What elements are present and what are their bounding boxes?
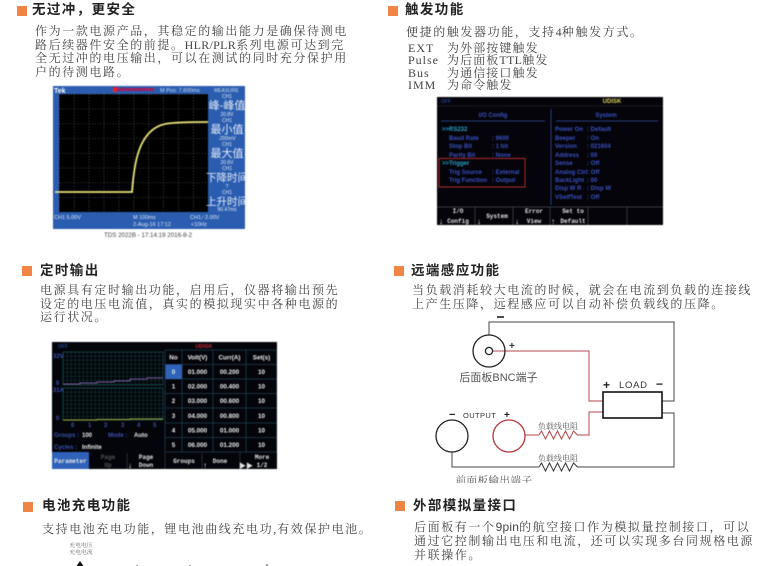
text block: trigger modes: 为命令触发: [447, 78, 513, 92]
screenshot: timer table screen: UDISK: [195, 344, 213, 350]
chart: oscilloscope screenshot: CH1: [222, 142, 232, 148]
screenshot: timer table screen: [51, 341, 278, 470]
heading: analog interface: 外部模拟量接口: [413, 498, 517, 513]
screenshot: IO config screen: Default: [560, 218, 586, 225]
screenshot: timer table screen: 10: [258, 413, 265, 420]
text block: analog interface: [414, 520, 754, 562]
chart: charging curve top edge: [69, 541, 268, 566]
section marker: [23, 502, 33, 512]
screenshot: timer table screen: Page: [139, 454, 154, 461]
screenshot: IO config screen: I/O Config: [479, 113, 508, 119]
panel: analog interface: [395, 498, 754, 562]
chart: oscilloscope screenshot: [52, 85, 247, 239]
screenshot: IO config screen: Trig Source: [449, 170, 483, 176]
screenshot: IO config screen: : On: [587, 136, 599, 142]
text block: no overshoot: 全无过冲的电压输出，可以在测试的同时充分保护用: [35, 51, 348, 65]
screenshot: timer table screen: 10: [258, 369, 265, 376]
screenshot: IO config screen: : Output: [492, 178, 515, 184]
chart: oscilloscope screenshot: CH1: [222, 166, 232, 172]
screenshot: IO config screen: View: [527, 218, 542, 225]
chart: oscilloscope screenshot: 峰-峰值: [209, 99, 245, 112]
screenshot: timer table screen: 5: [172, 442, 176, 449]
text block: timer output: [40, 283, 339, 324]
screenshot: timer table screen: 1: [172, 384, 176, 390]
screenshot: timer table screen: Cycles :: [54, 445, 77, 451]
screenshot: timer table screen: 31A: [53, 388, 65, 394]
screenshot: timer table screen: 0: [172, 369, 176, 376]
text block: timer output: 电源具有定时输出功能，启用后，仪器将输出预先: [40, 283, 339, 297]
screenshot: timer table screen: Set(s): [253, 354, 270, 362]
screenshot: IO config screen: : Off: [587, 161, 600, 167]
text block: no overshoot: 户的待测电路。: [35, 64, 130, 78]
text block: trigger modes: Bus: [408, 66, 430, 80]
text block: trigger intro: 便捷的触发器功能，支持4种触发方式。: [406, 25, 644, 39]
screenshot: timer table screen: 04.000: [188, 413, 208, 420]
screenshot: IO config screen: >>RS232: [442, 127, 468, 133]
screenshot: IO config screen: : None: [492, 153, 511, 159]
text block: battery charging: 支持电池充电功能，锂电池曲线充电功,有效保护电池。: [42, 522, 372, 536]
panel: trigger function: [388, 2, 664, 226]
screenshot: timer table screen: 2: [104, 423, 108, 429]
text block: no overshoot: 作为一款电源产品，其稳定的输出能力是确保待测电: [35, 24, 348, 38]
heading: battery charging: 电池充电功能: [42, 498, 131, 513]
chart: charging curve top edge: 充电电流: [69, 548, 93, 556]
diagram: remote sense wiring: +: [603, 378, 610, 392]
diagram: remote sense wiring: −: [656, 377, 663, 391]
diagram: remote sense wiring: 后面板BNC端子: [459, 370, 538, 384]
screenshot: IO config screen: Config: [447, 218, 469, 225]
heading: timer output: 定时输出: [40, 263, 100, 278]
screenshot: timer table screen: Up: [104, 462, 112, 469]
chart: oscilloscope screenshot: 下降时间: [206, 171, 247, 184]
screenshot: timer table screen: 0: [56, 416, 60, 422]
chart: oscilloscope screenshot: 最大值: [210, 146, 244, 160]
screenshot: IO config screen: Parity Bit: [449, 153, 475, 159]
screenshot: timer table screen: 00.800: [220, 413, 240, 420]
screenshot: timer table screen: 00.200: [220, 369, 240, 376]
diagram: remote sense wiring: OUTPUT: [463, 411, 496, 420]
diagram: remote sense wiring: 负载线电阻: [538, 453, 578, 463]
chart: oscilloscope screenshot: 上升时间: [206, 195, 247, 208]
section marker: [394, 266, 404, 276]
heading: remote sense: 远端感应功能: [411, 263, 500, 278]
screenshot: IO config screen: : Default: [587, 127, 611, 133]
screenshot: timer table screen: Curr(A): [218, 354, 241, 362]
screenshot: IO config screen: BackLight: [555, 178, 584, 184]
screenshot: timer table screen: 1/2: [257, 462, 268, 469]
text block: analog interface: 后面板有一个9pin的航空接口作为模拟量控制接口，可以: [414, 520, 750, 534]
screenshot: IO config screen: Set to: [562, 208, 584, 215]
screenshot: IO config screen: : Off: [587, 170, 600, 176]
screenshot: IO config screen: Power On: [555, 127, 583, 133]
screenshot: timer table screen: No: [169, 354, 178, 362]
screenshot: timer table screen: Volt(V): [188, 354, 207, 362]
heading: trigger: 触发功能: [405, 2, 465, 17]
screenshot: timer table screen: Groups :: [54, 433, 79, 439]
section marker: [22, 266, 32, 276]
screenshot: timer table screen: Page: [101, 454, 116, 461]
chart: oscilloscope screenshot: CH1 5.00V: [54, 215, 81, 221]
text block: remote sense: 上产生压降，远程感应可以自动补偿负载线的压降。: [412, 297, 725, 311]
screenshot: IO config screen: Stop Bit: [449, 144, 472, 150]
screenshot: timer table screen: 01.200: [220, 442, 240, 449]
chart: oscilloscope screenshot: Tek: [54, 88, 66, 95]
text block: analog interface: 并联操作。: [414, 548, 482, 562]
diagram: remote sense wiring: −: [449, 409, 455, 421]
screenshot: IO config screen: System: [595, 113, 617, 119]
text block: no overshoot: [35, 24, 348, 78]
screenshot: IO config screen: : External: [492, 170, 520, 176]
screenshot: timer table screen: 4: [172, 428, 176, 434]
screenshot: timer table screen: 1: [88, 423, 92, 429]
screenshot: timer table screen: Groups: [173, 458, 195, 465]
chart: oscilloscope screenshot: -200mV: [218, 136, 236, 142]
screenshot: timer table screen: 10: [258, 384, 265, 390]
chart: oscilloscope screenshot: 20.8V: [220, 112, 234, 118]
screenshot: timer table screen: 10: [258, 428, 265, 434]
chart: oscilloscope screenshot: CH1: [222, 94, 232, 100]
chart: oscilloscope screenshot: <10Hz: [191, 222, 207, 228]
screenshot: IO config screen: Error: [525, 208, 543, 215]
diagram: remote sense wiring: [435, 316, 674, 483]
screenshot: IO config screen: : 00: [587, 153, 598, 159]
screenshot: IO config screen: : 021604: [587, 144, 611, 150]
screenshot: timer table screen: Down: [139, 462, 154, 469]
screenshot: timer table screen: 05.000: [188, 428, 208, 434]
screenshot: IO config screen: VSelfTest: [555, 195, 582, 201]
diagram: remote sense wiring: +: [504, 410, 510, 421]
screenshot: timer table screen: 03.000: [188, 398, 208, 405]
chart: oscilloscope screenshot: 最小值: [210, 123, 244, 136]
screenshot: timer table screen: 3: [172, 413, 176, 420]
text block: trigger modes: Pulse: [408, 53, 439, 67]
screenshot: IO config screen: Baud Rate: [449, 136, 479, 142]
screenshot: IO config screen: UDISK: [603, 99, 622, 105]
chart: oscilloscope screenshot: CH1 ∕ 2.00V: [190, 215, 220, 221]
screenshot: timer table screen: 0: [56, 381, 60, 387]
text block: remote sense: [412, 283, 752, 311]
screenshot: IO config screen: Version: [555, 144, 577, 150]
screenshot: timer table screen: Done: [213, 458, 228, 465]
screenshot: IO config screen: Address: [555, 153, 580, 159]
chart: charging curve top edge: 充电电压: [69, 541, 93, 549]
diagram: remote sense wiring: +: [509, 341, 515, 352]
screenshot: timer table screen: 00.400: [220, 384, 240, 390]
text block: remote sense: 当负载消耗较大电流的时候，就会在电流到负载的连接线: [412, 283, 752, 297]
chart: oscilloscope screenshot: MEASURE: [214, 88, 239, 94]
panel: battery charging: [23, 498, 372, 566]
screenshot: timer table screen: 10: [258, 442, 265, 449]
text block: trigger modes: IMM: [408, 78, 436, 92]
screenshot: IO config screen: System: [486, 213, 508, 220]
screenshot: timer table screen: More: [255, 454, 270, 461]
text block: trigger modes: EXT: [408, 41, 434, 55]
chart: oscilloscope screenshot: CH1: [222, 190, 232, 196]
screenshot: IO config screen: >>Trigger: [442, 161, 470, 167]
screenshot: timer table screen: 5: [153, 423, 157, 429]
screenshot: IO config screen: : 00: [587, 178, 598, 184]
screenshot: timer table screen: 2: [172, 398, 176, 405]
chart: oscilloscope screenshot: 90.47ms: [217, 207, 237, 213]
section marker: [17, 6, 27, 16]
diagram: remote sense wiring: LOAD: [619, 380, 648, 391]
section marker: [395, 501, 405, 511]
screenshot: IO config screen: : Off: [587, 195, 600, 201]
chart: oscilloscope screenshot: TDS 2022B - 17:14:19 2016-8-2: [104, 232, 193, 239]
screenshot: timer table screen: 02.000: [188, 384, 208, 390]
chart: oscilloscope screenshot: ?: [226, 184, 229, 190]
screenshot: timer table screen: Parameter: [54, 458, 87, 465]
text block: trigger modes: [408, 41, 548, 92]
heading: no overshoot: 无过冲，更安全: [32, 2, 136, 17]
screenshot: IO config screen: Analog Ctrl: [555, 170, 588, 176]
screenshot: timer table screen: Auto: [134, 433, 148, 439]
screenshot: timer table screen: 3: [121, 423, 125, 429]
screenshot: timer table screen: 01.000: [188, 369, 208, 376]
screenshot: IO config screen: Sense: [555, 161, 573, 167]
screenshot: timer table screen: Mode :: [108, 433, 127, 439]
screenshot: timer table screen: 32V: [53, 354, 64, 360]
screenshot: IO config screen: Disp W R: [555, 186, 582, 192]
chart: oscilloscope screenshot: M 100ms: [133, 215, 156, 221]
screenshot: IO config screen: : Disp W: [587, 186, 611, 192]
screenshot: timer table screen: Infinite: [82, 445, 102, 451]
text block: timer output: 设定的电压电流值，真实的模拟现实中各种电源的: [40, 296, 339, 310]
diagram: remote sense wiring: 负载线电阻: [538, 421, 578, 431]
panel: no overshoot: [17, 2, 348, 239]
screenshot: IO config screen: Beeper: [555, 136, 576, 142]
screenshot: IO config screen: [436, 96, 664, 226]
screenshot: timer table screen: 4: [137, 423, 141, 429]
screenshot: IO config screen: OFF: [441, 99, 451, 105]
text block: timer output: 运行状况。: [40, 310, 108, 324]
chart: oscilloscope screenshot: 20.6V: [220, 160, 234, 166]
panel: remote sense: [394, 263, 752, 483]
screenshot: timer table screen: 06.000: [188, 442, 208, 449]
text block: analog interface: 通过它控制输出电压和电流，还可以实现多台同规格电源: [414, 534, 754, 548]
chart: oscilloscope screenshot: M Pos: 7.600ms: [160, 88, 200, 94]
text block: trigger modes: 为外部按键触发: [447, 41, 539, 55]
text block: trigger modes: 为后面板TTL触发: [447, 53, 548, 67]
screenshot: IO config screen: Trig Function: [449, 178, 487, 184]
chart: oscilloscope screenshot: CH1: [222, 118, 232, 124]
screenshot: timer table screen: 00.600: [220, 398, 240, 405]
chart: oscilloscope screenshot: 2-Aug-16 17:12: [133, 222, 171, 228]
panel: timer output: [22, 263, 339, 470]
text block: trigger modes: 为通信接口触发: [447, 66, 539, 80]
screenshot: timer table screen: 0: [71, 423, 75, 429]
screenshot: IO config screen: : 1 bit: [492, 144, 508, 150]
screenshot: timer table screen: OFF: [58, 344, 68, 350]
screenshot: IO config screen: I/O: [453, 208, 464, 215]
screenshot: IO config screen: : 9600: [492, 136, 510, 142]
text block: no overshoot: 路后续器件安全的前提。HLR/PLR系列电源可达到完: [35, 38, 345, 52]
screenshot: timer table screen: 01.000: [220, 428, 240, 434]
section marker: [388, 6, 398, 16]
screenshot: timer table screen: 10: [258, 398, 265, 405]
screenshot: timer table screen: 100: [82, 433, 93, 439]
